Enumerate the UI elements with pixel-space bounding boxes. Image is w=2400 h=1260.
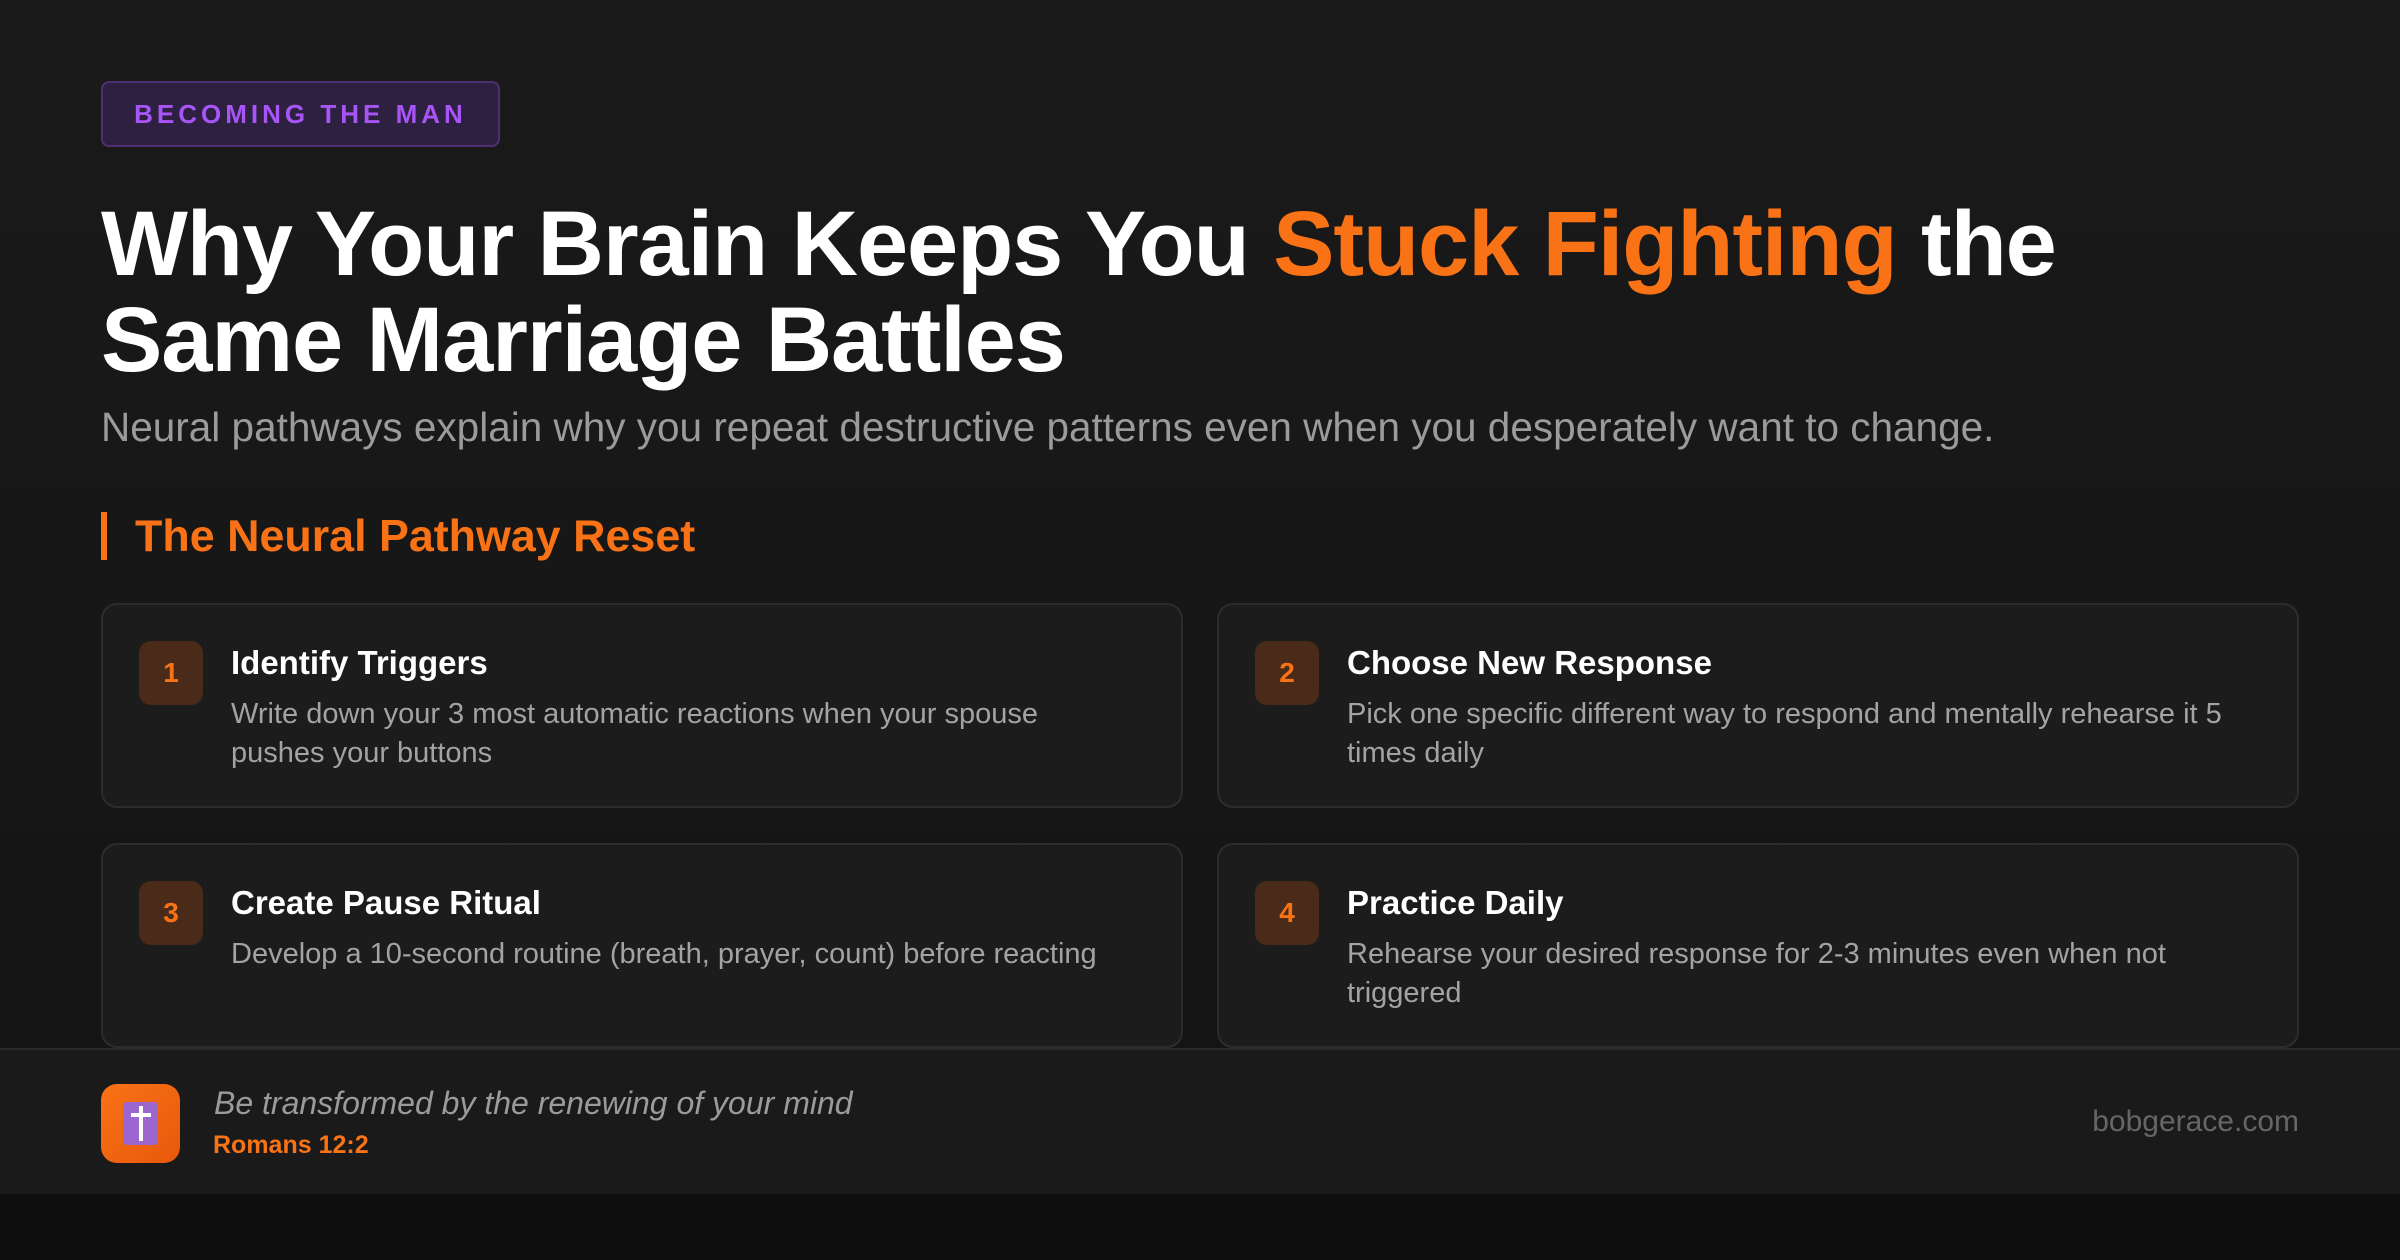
card 1 bbox=[101, 603, 1183, 808]
card 1 text: Write down your 3 most automatic reactions when your spouse pushes your buttons bbox=[231, 698, 1038, 769]
card 4 bbox=[1217, 843, 2299, 1048]
card 2 bbox=[1217, 603, 2299, 808]
number 3: 3 bbox=[163, 897, 179, 928]
number 1 bbox=[139, 641, 203, 705]
number 2: 2 bbox=[1279, 657, 1295, 688]
footer bbox=[0, 1048, 2400, 1194]
card 4 title: Practice Daily bbox=[1347, 884, 1563, 921]
reference: Romans 12:2 bbox=[213, 1131, 369, 1159]
website: bobgerace.com bbox=[2092, 1105, 2299, 1138]
number 3 bbox=[139, 881, 203, 945]
title: Same Marriage Battles bbox=[101, 289, 1065, 391]
card 2 title: Choose New Response bbox=[1347, 644, 1712, 681]
card 4 text: Rehearse your desired response for 2-3 minutes even when not triggered bbox=[1347, 938, 2166, 1009]
number 2 bbox=[1255, 641, 1319, 705]
card 3 text: Develop a 10-second routine (breath, prayer, count) before reacting bbox=[231, 938, 1097, 970]
badge: BECOMING THE MAN bbox=[134, 99, 467, 129]
card 3 bbox=[101, 843, 1183, 1048]
title: Why Your Brain Keeps You Stuck Fighting the bbox=[101, 193, 2056, 295]
quote: Be transformed by the renewing of your mind bbox=[214, 1085, 853, 1121]
card 3 title: Create Pause Ritual bbox=[231, 884, 541, 921]
title bbox=[101, 193, 2056, 391]
section heading: The Neural Pathway Reset bbox=[135, 511, 695, 561]
card 1 title: Identify Triggers bbox=[231, 644, 488, 681]
card 2 text: Pick one specific different way to respond and mentally rehearse it 5 times daily bbox=[1347, 698, 2222, 769]
subtitle: Neural pathways explain why you repeat destructive patterns even when you desperately want to change. bbox=[101, 404, 1994, 450]
badge bbox=[101, 81, 500, 147]
icon: cross bbox=[101, 1084, 180, 1163]
number 4 bbox=[1255, 881, 1319, 945]
number 1: 1 bbox=[163, 657, 179, 688]
number 4: 4 bbox=[1279, 897, 1295, 928]
